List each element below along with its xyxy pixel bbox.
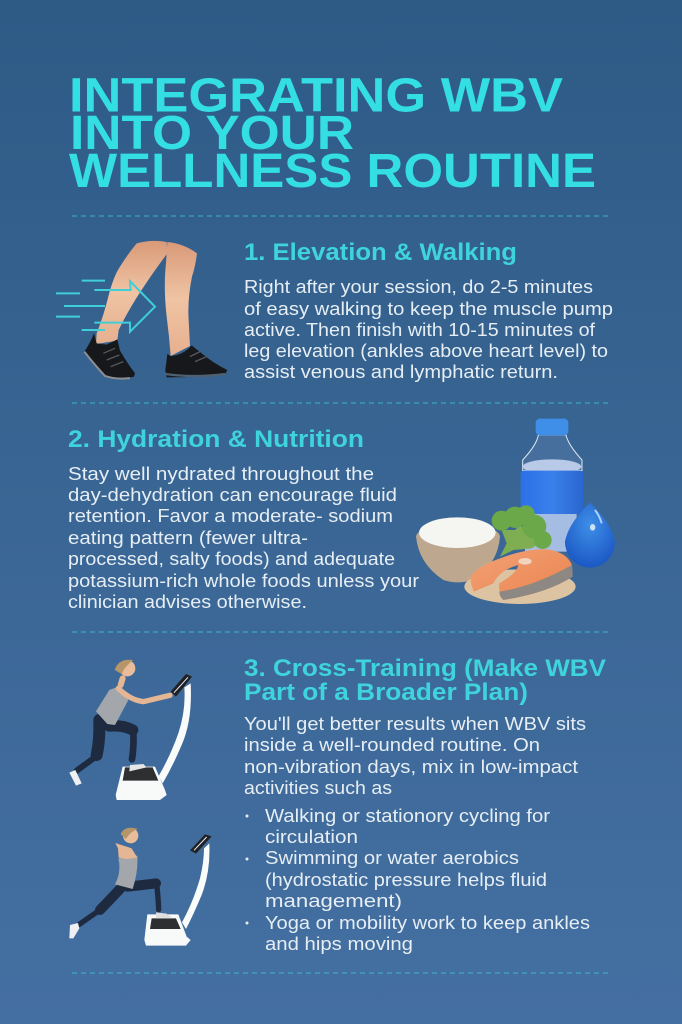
title: INTO YOUR [70,107,354,160]
icon: water bottle, drop and healthy food [416,419,615,604]
list: low-impact activities: Swimming or water aerobics [265,848,519,868]
list: low-impact activities: management) [265,891,402,911]
text: hydration and nutrition: retention. Favor a moderate- sodium [68,506,393,526]
title [69,70,596,198]
text: hydration and nutrition: processed, salty foods) and adequate [68,549,395,569]
icon: woman stepping on vibration plate [69,660,192,800]
panel: cross-training [69,655,606,954]
text: hydration and nutrition [68,464,419,612]
text: hydration and nutrition: day-dehydration can encourage fluid [68,485,397,505]
panel: elevation and walking [56,239,613,382]
list: low-impact activities: (hydrostatic pressure helps fluid [265,870,547,890]
list: low-impact activities [246,806,590,954]
text: hydration and nutrition: Stay well nydrated throughout the [68,464,374,484]
heading: cross-training: 3. Cross-Training (Make WBV [244,655,606,682]
heading: cross-training: Part of a Broader Plan) [244,679,528,706]
text: cross-training intro: inside a well-rounded routine. On [244,735,540,755]
text: cross-training intro: activities such as [244,778,392,798]
text: hydration and nutrition: potassium-rich whole foods unless your [68,571,419,591]
title: WELLNESS ROUTINE [69,145,596,198]
list: low-impact activities: Walking or stationory cycling for [265,806,550,826]
panel: hydration and nutrition [68,419,615,612]
title: INTEGRATING WBV [69,70,563,122]
text: elevation and walking: of easy walking to keep the muscle pump [244,299,613,319]
text: cross-training intro [244,714,586,798]
text: hydration and nutrition: eating pattern (fewer ultra- [68,528,308,548]
text: elevation and walking [244,277,613,382]
text: hydration and nutrition: clinician advises otherwise. [68,592,307,612]
text: elevation and walking: active. Then finish with 10-15 minutes of [244,320,596,340]
heading: elevation and walking: 1. Elevation & Walking [244,239,517,266]
heading: cross-training [244,655,606,706]
icon: walking legs with arrow [56,241,227,379]
list: low-impact activities: and hips moving [265,934,413,954]
text: elevation and walking: assist venous and lymphatic return. [244,362,558,382]
heading: hydration and nutrition: 2. Hydration & Nutrition [68,426,364,453]
text: cross-training intro: You'll get better results when WBV sits [244,714,586,734]
icon: woman lunging on vibration plate [69,828,212,946]
text: elevation and walking: leg elevation (ankles above heart level) to [244,341,608,361]
list: low-impact activities: circulation [265,827,358,847]
list: low-impact activities: Yoga or mobility work to keep ankles [265,913,590,933]
text: cross-training intro: non-vibration days, mix in low-impact [244,757,578,777]
text: elevation and walking: Right after your session, do 2-5 minutes [244,277,593,297]
